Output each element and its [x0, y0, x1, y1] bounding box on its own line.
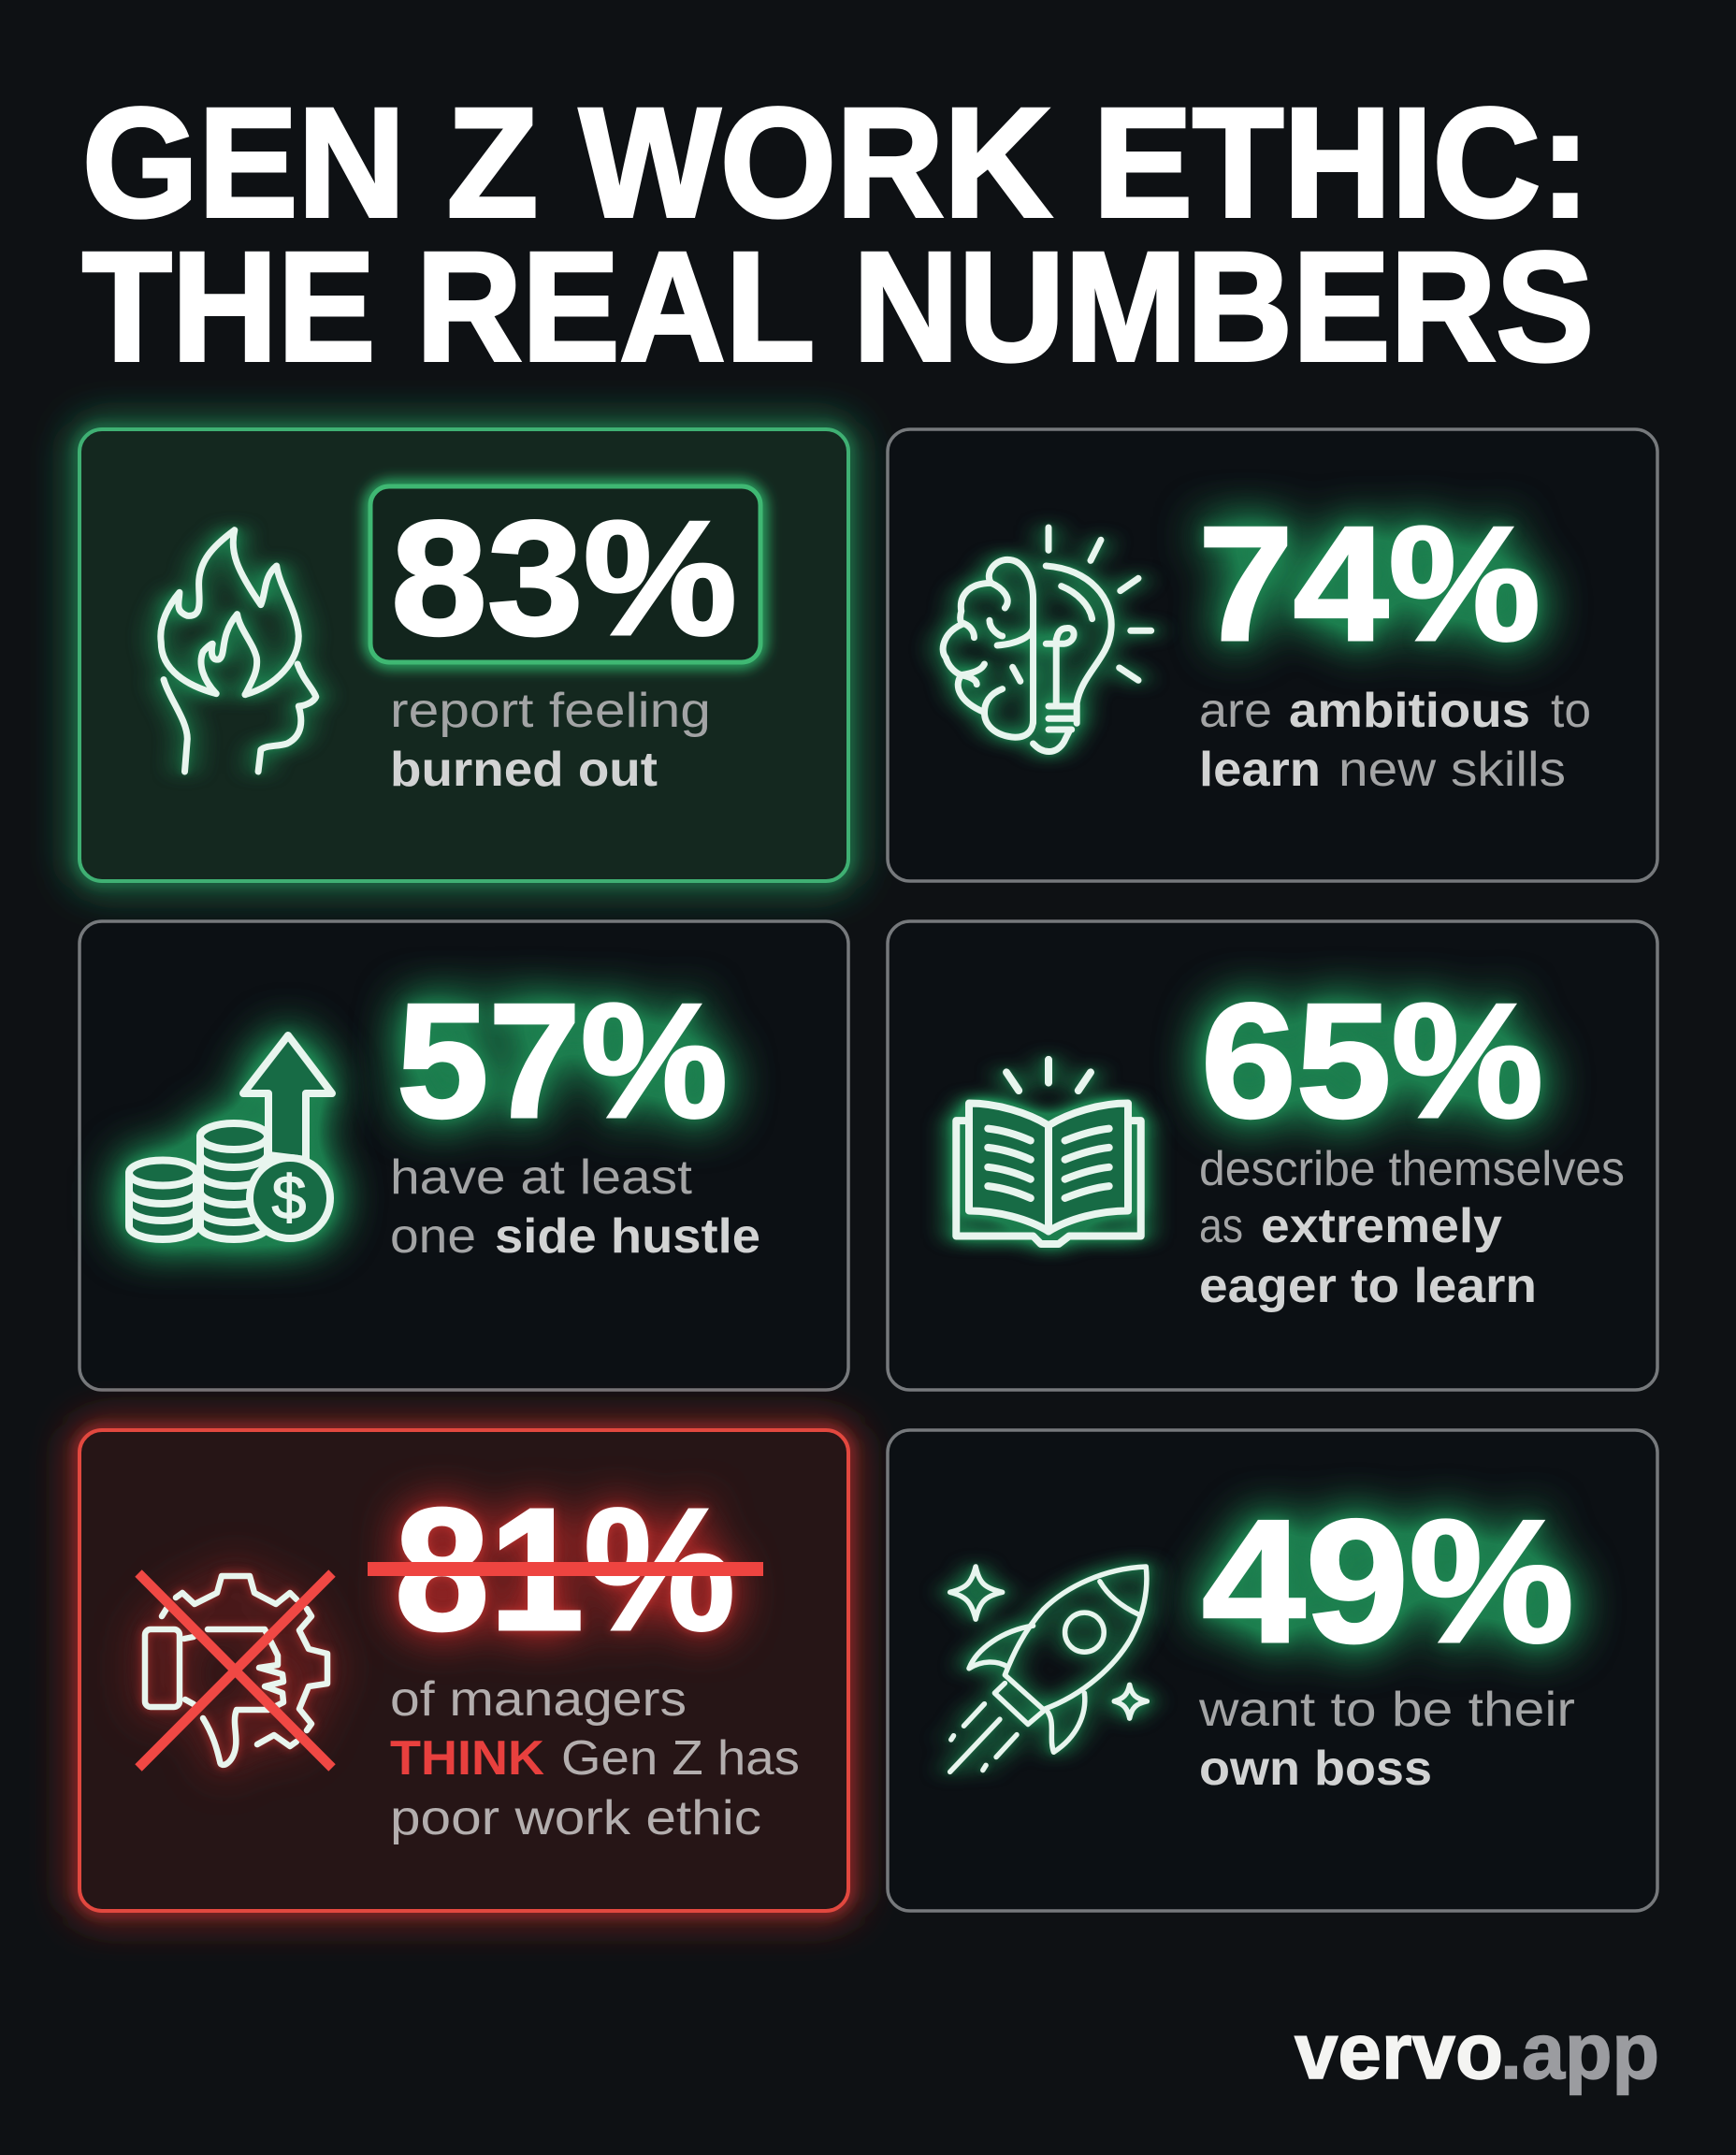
caption: [390, 684, 711, 797]
panel: 49% own boss: [888, 1430, 1657, 1911]
caption: extremely: [1261, 1199, 1502, 1253]
caption: as: [1199, 1199, 1243, 1253]
caption: [390, 1672, 800, 1845]
caption: learn: [1199, 743, 1321, 797]
caption: describe themselves: [1199, 1142, 1625, 1196]
caption: report feeling: [390, 684, 711, 738]
caption: side hustle: [495, 1209, 760, 1264]
panel: 57% side hustle: [80, 921, 848, 1390]
caption: to: [1551, 684, 1591, 738]
stat number: 49%: [1202, 1483, 1574, 1679]
caption: poor work ethic: [390, 1791, 761, 1845]
panel: 65% eager to learn: [888, 921, 1657, 1390]
icon: flaming head: [161, 530, 316, 772]
stat number struck through: 81%: [395, 1473, 735, 1667]
caption: ambitious: [1289, 684, 1530, 738]
panel: 81% managers think: [80, 1430, 848, 1911]
caption: eager to learn: [1199, 1259, 1537, 1313]
highlighted number box: 83%: [391, 486, 737, 669]
caption: want to be their: [1198, 1683, 1575, 1737]
title: GEN Z WORK ETHIC:: [82, 77, 1590, 250]
caption: [1199, 684, 1591, 797]
footer brand: [1295, 2007, 1659, 2095]
caption: new skills: [1338, 743, 1566, 797]
panel: 74% ambitious: [888, 429, 1657, 881]
stat number: 57%: [397, 969, 728, 1151]
caption: [1199, 1142, 1625, 1313]
footer brand: .app: [1500, 2007, 1659, 2095]
caption: [1198, 1683, 1575, 1796]
caption: of managers: [390, 1672, 687, 1727]
caption: THINK: [390, 1731, 544, 1786]
caption: have at least: [390, 1150, 693, 1205]
icon: brain lightbulb: [943, 528, 1151, 752]
icon: rocket: [950, 1567, 1147, 1772]
title: THE REAL NUMBERS: [82, 221, 1594, 394]
caption: burned out: [390, 743, 658, 797]
caption: are: [1199, 684, 1272, 738]
title: [82, 77, 1594, 394]
caption: Gen Z has: [561, 1731, 800, 1786]
stat number: 65%: [1201, 969, 1543, 1151]
footer brand: vervo: [1295, 2007, 1503, 2095]
caption: one: [390, 1209, 476, 1264]
caption: [390, 1150, 760, 1264]
stat number: 74%: [1198, 492, 1541, 674]
caption: own boss: [1199, 1742, 1432, 1796]
icon: coins with arrow: [129, 1035, 332, 1239]
icon: crossed-out gear with thumbs down: [138, 1573, 332, 1768]
panel: 83% burned out: [80, 429, 848, 881]
icon: red cross: [138, 1573, 332, 1768]
icon: dollar sign: $: [272, 1163, 306, 1232]
icon: open book: [956, 1060, 1141, 1244]
